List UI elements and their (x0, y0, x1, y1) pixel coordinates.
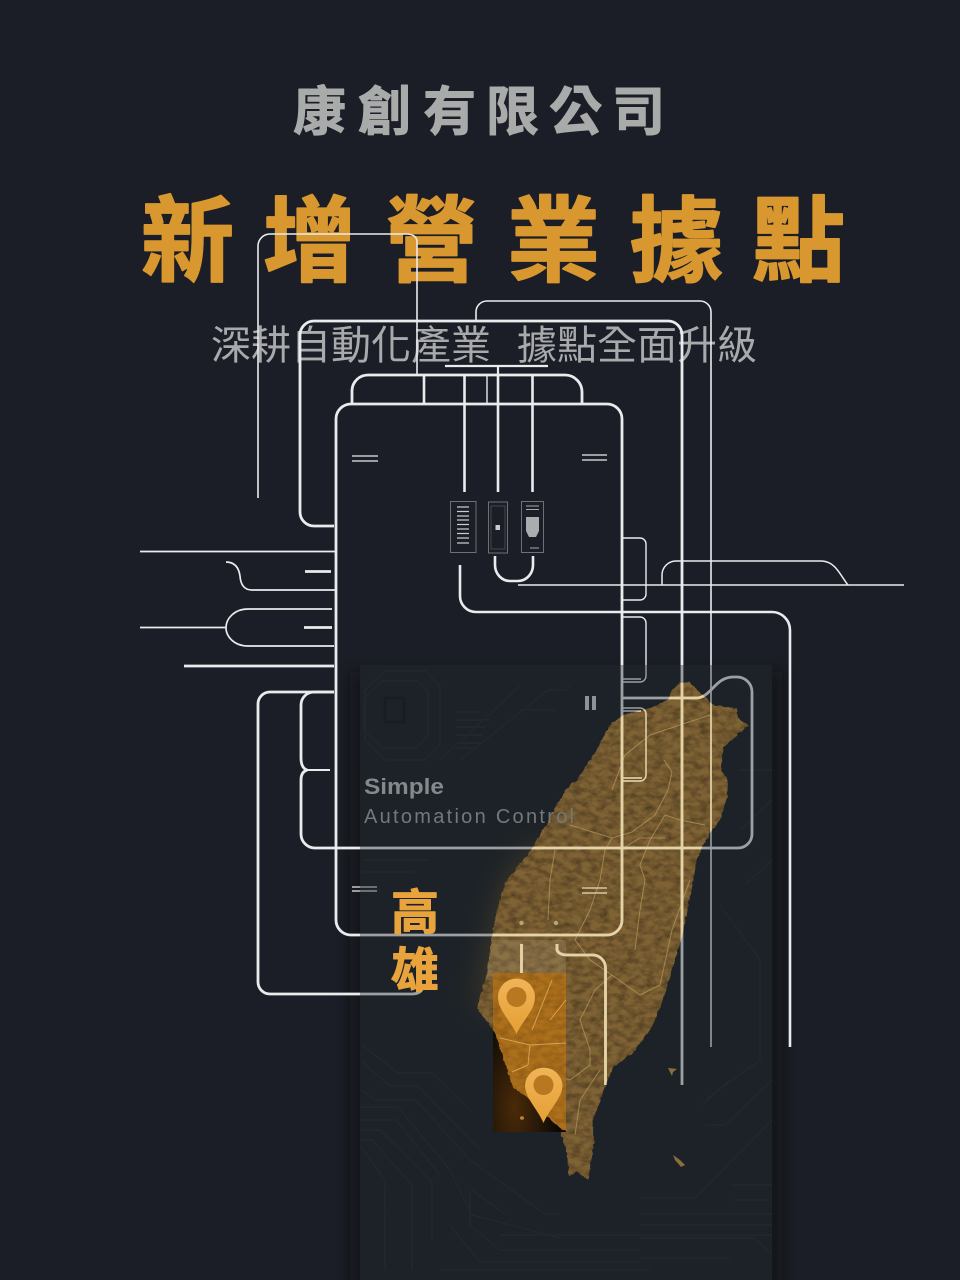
lines seen through the map panel (360, 665, 754, 1085)
top bar and connector (445, 366, 548, 375)
terrain texture (470, 675, 755, 1185)
subtitle: 據點全面升級 (517, 324, 757, 368)
control modules (450, 502, 544, 553)
circuit texture: chip octagons (362, 671, 572, 890)
thin line with bump right (518, 561, 904, 585)
panel label: Simple: Simple (364, 774, 444, 799)
left dashes and bar (184, 572, 334, 666)
main title: 新增營業據點 (141, 190, 845, 294)
long connector right (460, 565, 790, 1047)
small side tabs (622, 538, 646, 781)
island landmass (477, 682, 749, 1180)
module 1 (450, 502, 476, 552)
rivers (548, 714, 710, 1135)
location pin: south (525, 1068, 562, 1123)
highlighted terrain (493, 973, 566, 1130)
corner dashes (352, 455, 607, 893)
location label: 高 (391, 887, 439, 940)
circuit texture: lower left traces (360, 1045, 772, 1270)
islands (668, 1068, 685, 1167)
pause icon (585, 696, 596, 710)
main device body (336, 404, 622, 935)
bright lines outside map (140, 234, 904, 1085)
highlighted rivers (500, 980, 566, 1072)
highlighted land (493, 973, 566, 1131)
subtitle: 深耕自動化產業 (211, 324, 491, 368)
vertical connectors (424, 375, 532, 492)
outer frame right (300, 321, 682, 1085)
lower connectors (522, 944, 606, 1085)
left signal lines (140, 552, 335, 646)
lower left outer frame (258, 692, 423, 994)
panel label: Automation Control: Automation Control (364, 806, 574, 828)
module 3 (522, 502, 544, 552)
circuit outline lines (140, 234, 904, 1085)
company name heading: 康創有限公司 (293, 83, 665, 142)
highlight region: kaohsiung (493, 973, 566, 1132)
location label (391, 887, 439, 998)
map small dots (519, 921, 558, 925)
location pin: north (498, 978, 535, 1034)
wide rounded frame (301, 677, 752, 848)
U connector (495, 556, 533, 581)
thin frame upper left (258, 234, 417, 498)
lines seen over the island (492, 682, 712, 1085)
taiwan map (470, 675, 755, 1185)
module 2 (488, 502, 508, 553)
map panel (360, 665, 772, 1280)
thin frame upper right (476, 301, 711, 1047)
tab on main body (352, 375, 582, 404)
circuit texture: lower right traces (640, 770, 772, 1258)
location label: 雄 (391, 945, 439, 998)
map panel shadow (350, 672, 782, 1280)
taiwan glow (471, 842, 536, 1007)
small island (520, 1116, 524, 1120)
